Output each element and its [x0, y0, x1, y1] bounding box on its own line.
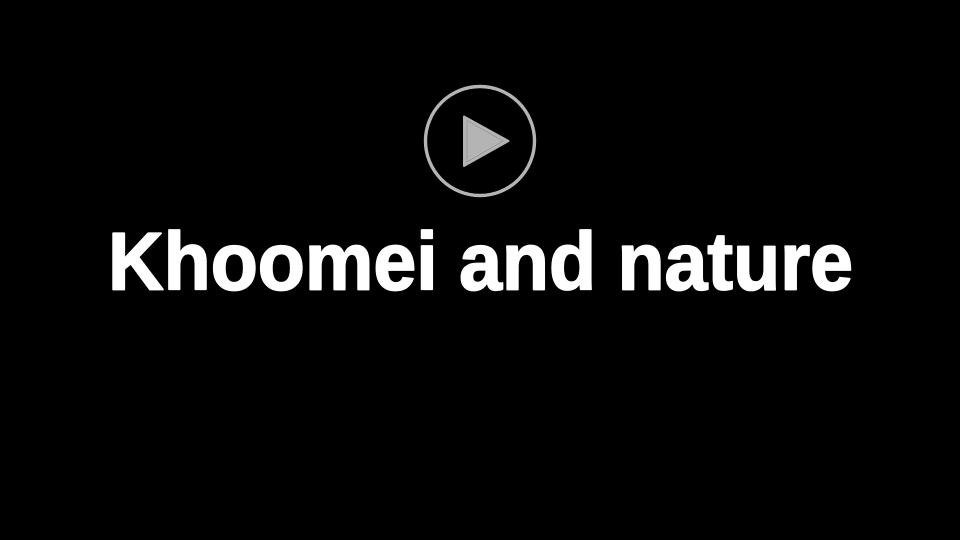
icon: play button — [424, 84, 536, 198]
